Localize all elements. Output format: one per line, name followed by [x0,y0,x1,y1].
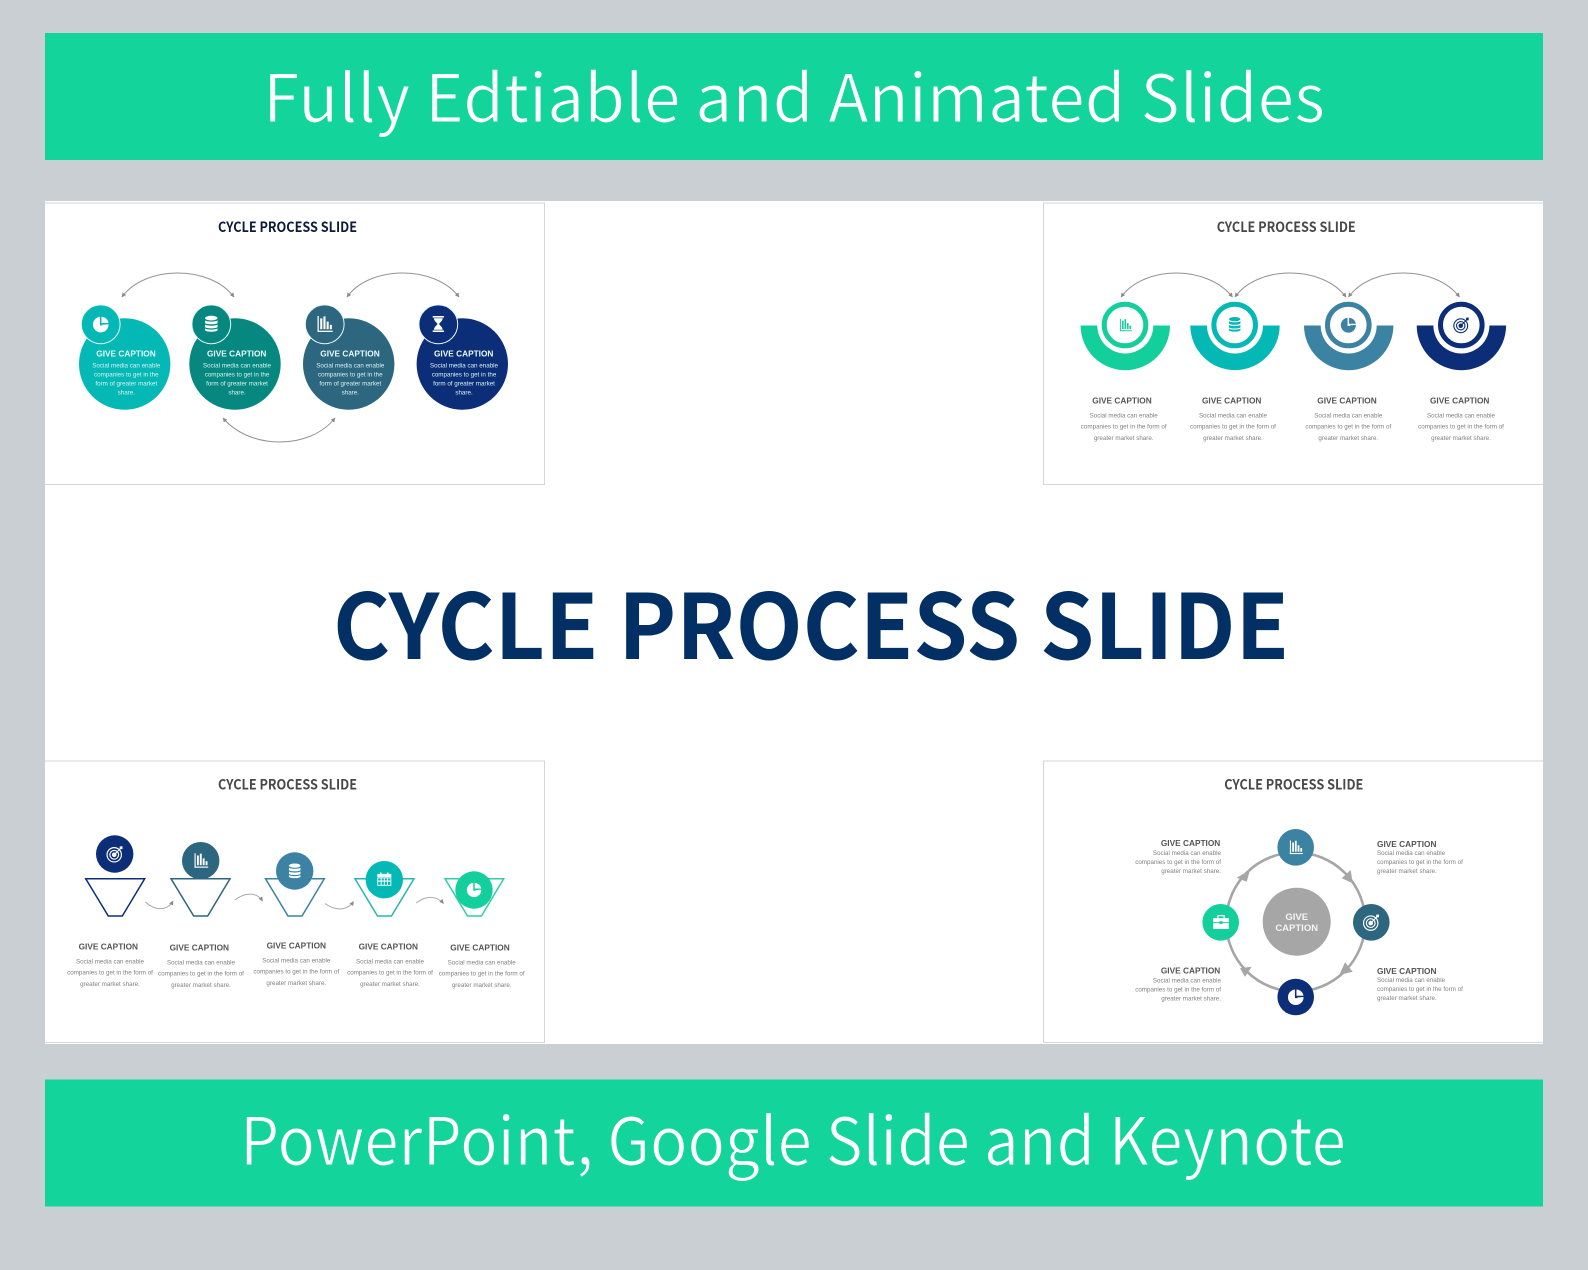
slide 4 heading: CYCLE PROCESS SLIDE [1224,775,1363,795]
step 1 half ring [1081,304,1170,442]
step 1 circle: GIVE CAPTION [96,349,156,359]
slide 1 heading: CYCLE PROCESS SLIDE [218,217,357,237]
step 5 funnel [439,871,525,989]
slide 1 arrows [122,273,459,442]
step 4 half ring: GIVE CAPTION [1430,395,1489,405]
slide 2 heading: CYCLE PROCESS SLIDE [1217,217,1356,237]
step 2 half ring: companies to get in the form of [1190,424,1276,431]
text block: bottom right: GIVE CAPTION [1377,966,1436,976]
step 4 circle: GIVE CAPTION [434,349,493,359]
panel: slide 3 funnels [45,761,544,1042]
step 1 funnel [67,835,153,988]
node: top [1277,829,1314,866]
step 4 circle: share. [455,389,473,396]
step 3 circle: companies to get in the [318,371,383,378]
text block: bottom right: Social media can enable [1377,977,1446,984]
text block: bottom right [1377,966,1463,1002]
step 1 funnel: greater market share. [80,981,140,988]
step 5 funnel: companies to get in the form of [439,971,525,978]
step 4 half ring: companies to get in the form of [1418,424,1504,431]
step 4 funnel: GIVE CAPTION [359,942,418,952]
step 2 half ring [1190,304,1280,442]
step 3 circle [303,305,394,410]
top banner text: Fully Edtiable and Animated Slides [263,46,1325,142]
text block: top left: companies to get in the form of [1135,859,1221,866]
text block: top left: greater market share. [1161,868,1221,875]
slide 3 heading: CYCLE PROCESS SLIDE [218,775,357,795]
step 3 funnel [253,852,339,987]
step 2 half ring: Social media can enable [1199,412,1268,419]
step 3 funnel: GIVE CAPTION [267,940,326,950]
slide 3 arrows [146,894,444,909]
step 4 half ring: greater market share. [1431,435,1491,442]
step 3 funnel: companies to get in the form of [253,969,339,976]
top banner [45,33,1543,160]
panel: slide 1 circles [45,203,544,484]
step 3 half ring: Social media can enable [1314,412,1383,419]
step 2 funnel: greater market share. [171,982,231,989]
centre circle [1263,888,1331,956]
cycle ring with arrowheads [1226,852,1365,992]
main title: CYCLE PROCESS SLIDE [333,555,1289,685]
step 2 half ring: GIVE CAPTION [1202,395,1261,405]
text block: top right: companies to get in the form of [1377,859,1463,866]
step 1 circle: companies to get in the [94,371,159,378]
step 2 funnel: companies to get in the form of [158,971,244,978]
step 3 half ring: GIVE CAPTION [1317,395,1377,405]
step 3 circle: GIVE CAPTION [320,349,380,359]
centre circle: GIVE [1285,912,1308,923]
step 2 circle: form of greater market [206,380,268,387]
step 5 funnel: greater market share. [452,982,512,989]
step 3 half ring: companies to get in the form of [1305,424,1391,431]
node: right [1353,904,1390,941]
step 3 circle: share. [342,389,359,396]
step 1 funnel: GIVE CAPTION [79,942,138,952]
text block: bottom right: greater market share. [1377,995,1437,1002]
step 1 circle [79,305,170,410]
step 1 circle: share. [118,389,135,396]
text block: top right: Social media can enable [1377,850,1446,857]
step 1 funnel: Social media can enable [76,958,145,965]
step 3 funnel: greater market share. [266,980,326,987]
text block: bottom left: greater market share. [1161,996,1221,1003]
step 1 half ring: Social media can enable [1090,412,1158,419]
text block: top right: GIVE CAPTION [1377,839,1436,849]
step 3 half ring [1304,304,1393,442]
step 4 funnel: Social media can enable [356,958,425,965]
slide 2 arrows [1121,273,1460,297]
step 3 funnel: Social media can enable [262,957,331,964]
step 5 funnel: Social media can enable [448,959,516,966]
step 2 circle: GIVE CAPTION [207,349,266,359]
white central panel [45,201,1543,1044]
step 2 funnel [158,842,244,989]
step 1 circle: form of greater market [95,380,157,387]
step 1 circle: Social media can enable [92,362,161,369]
text block: bottom right: companies to get in the form of [1377,986,1463,993]
node: left [1202,904,1239,941]
step 4 circle [417,305,508,410]
step 1 half ring: companies to get in the form of [1081,424,1167,431]
text block: top right [1377,839,1463,875]
step 4 circle: form of greater market [433,380,495,387]
step 3 circle: Social media can enable [316,362,385,369]
centre circle: CAPTION [1275,923,1318,934]
text block: bottom left: GIVE CAPTION [1161,966,1220,976]
step 3 half ring: greater market share. [1318,435,1378,442]
step 2 funnel: Social media can enable [167,959,236,966]
bottom banner text: PowerPoint, Google Slide and Keynote [240,1089,1346,1185]
panel: slide 2 half rings [1044,203,1543,484]
step 4 funnel: greater market share. [360,981,420,988]
panel: slide 4 cycle [1044,761,1543,1042]
step 2 half ring: greater market share. [1203,435,1263,442]
step 1 half ring: GIVE CAPTION [1092,395,1152,405]
step 4 circle: Social media can enable [430,362,499,369]
step 2 circle: Social media can enable [203,362,272,369]
text block: bottom left [1135,966,1222,1003]
text block: bottom left: Social media can enable [1153,978,1222,985]
step 2 circle: share. [228,389,246,396]
node: bottom [1277,979,1314,1015]
step 5 funnel: GIVE CAPTION [450,943,510,953]
step 3 circle: form of greater market [319,380,381,387]
text block: top right: greater market share. [1377,868,1437,875]
step 4 half ring [1417,304,1506,442]
text block: top left: Social media can enable [1153,850,1222,857]
step 2 funnel: GIVE CAPTION [170,943,229,953]
text block: top left: GIVE CAPTION [1161,838,1220,848]
step 2 circle [189,305,281,410]
step 1 funnel: companies to get in the form of [67,970,153,977]
bottom banner [45,1080,1543,1206]
step 4 half ring: Social media can enable [1427,412,1496,419]
text block: bottom left: companies to get in the form of [1135,987,1221,994]
step 4 circle: companies to get in the [432,371,497,378]
text block: top left [1135,838,1222,875]
step 2 circle: companies to get in the [205,371,270,378]
step 1 half ring: greater market share. [1094,435,1154,442]
step 4 funnel: companies to get in the form of [347,970,433,977]
step 4 funnel [347,861,433,988]
